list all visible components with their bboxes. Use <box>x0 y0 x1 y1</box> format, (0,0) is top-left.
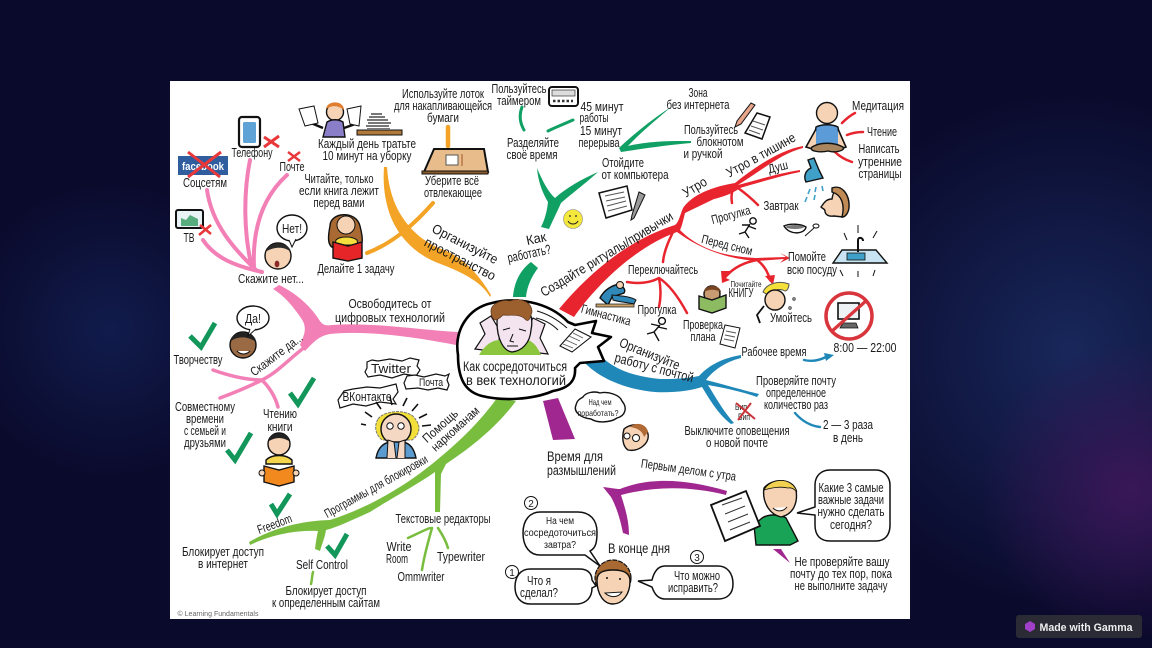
label: blocks access to specific sites: к определенным сайтам <box>272 596 380 610</box>
branch: organize email (blue) <box>576 293 897 450</box>
icon: boy reading green book <box>699 286 726 313</box>
label: use notebook and pen: блокнотом <box>696 135 744 149</box>
icon: thought bubble and face: поработать? <box>578 408 619 418</box>
panel: mind map <box>170 81 910 619</box>
icon: stressed person <box>361 397 431 458</box>
icon: sink <box>833 225 887 277</box>
icon: running figure 2 <box>647 318 667 341</box>
icon: speech cloud mail <box>404 374 449 390</box>
label: help for addicts <box>420 404 482 454</box>
label: family time: друзьями <box>184 436 226 450</box>
callout: what did I do <box>515 569 596 604</box>
label: plan review <box>683 318 723 344</box>
title: how to focus in the age of technology: Как сосредоточиться <box>463 359 567 374</box>
label: read a book <box>728 280 762 300</box>
label: blocks internet access: Блокирует доступ <box>182 545 264 559</box>
label: free yourself from digital technology <box>335 297 445 325</box>
label: reading books: книги <box>268 420 293 434</box>
label: use paper tray: бумаги <box>427 111 459 125</box>
icon: bowl and spoon <box>784 224 819 236</box>
label: plan review: Проверка <box>683 318 723 332</box>
icon: step number 1 <box>506 566 518 579</box>
badge: Made with Gamma <box>1016 615 1142 638</box>
label: help for addicts: Помощь <box>420 406 461 446</box>
branch: digital detox (pink) <box>174 117 458 486</box>
label: family time: Совместному <box>175 400 236 414</box>
label: remove distractions: отвлекающее <box>424 186 482 200</box>
label: internet-free zone <box>666 86 730 112</box>
callout: three most important tasks: Какие 3 самые <box>818 481 884 495</box>
label: quiet morning: Утро в тишине <box>724 130 798 180</box>
label: organize work with email: работу с почтой <box>613 350 695 385</box>
title: how to focus in the age of technology: в век технологий <box>466 373 566 388</box>
label: working hours: Рабочее время <box>742 345 806 359</box>
branch: rituals and habits (red) <box>538 99 904 348</box>
label: at the end of the day: В конце дня <box>608 541 670 556</box>
label: walk: Прогулка <box>710 203 752 227</box>
label: how to work: работать? <box>506 242 552 266</box>
icon: bing crossed out <box>735 402 755 422</box>
label: free yourself from digital technology: цифровых технологий <box>335 311 445 325</box>
label: blocks internet access: в интернет <box>198 557 248 571</box>
icon: bing crossed out: Бип <box>735 402 747 412</box>
label: daily tidy-up <box>318 137 416 163</box>
callout: what did I do: сделал? <box>520 586 558 600</box>
label: walk: Прогулка <box>638 303 677 317</box>
icon: phone crossed out <box>239 117 279 147</box>
label: meditation: Медитация <box>852 99 904 113</box>
label: Typewriter: Typewriter <box>437 550 485 564</box>
icon: smiley <box>564 210 582 228</box>
label: read only when book is in front of you <box>299 172 379 210</box>
label: time for reflection: размышлений <box>547 463 616 478</box>
label: 45 minutes work 15 minutes break: 45 минут <box>580 100 624 114</box>
icon: face saying yes <box>230 306 269 358</box>
label: read only when book is in front of you: если книга лежит <box>299 184 379 198</box>
icon: plan sheet <box>720 325 740 348</box>
callout: what to focus on tomorrow: сосредоточиться <box>524 528 596 539</box>
label: how to work <box>506 229 552 266</box>
label: wash the dishes <box>787 250 838 277</box>
icon: boy reading <box>259 433 299 486</box>
label: use notebook and pen <box>684 123 744 161</box>
label: wash up: Умойтесь <box>770 311 812 325</box>
label: before bed: Перед сном <box>700 232 754 258</box>
callout: what to focus on tomorrow: завтра? <box>544 540 576 551</box>
label: 2-3 times a day: в день <box>833 431 863 445</box>
icon: speech cloud Twitter: Twitter <box>371 362 411 376</box>
icon: thought bubble and face: Над чем <box>588 397 612 407</box>
label: remove distractions <box>424 174 482 200</box>
label: use timer: таймером <box>497 94 541 108</box>
label: TV: ТВ <box>184 231 194 245</box>
label: 2-3 times a day <box>823 418 873 445</box>
label: 8:00 to 22:00: 8:00 — 22:00 <box>834 341 897 355</box>
icon: flying sheet of paper <box>560 329 591 352</box>
icon: facebook crossed out <box>178 152 228 177</box>
callout: what can be improved: Что можно <box>674 569 720 583</box>
label: turn off notifications <box>684 424 790 450</box>
icon: check marks <box>190 323 314 460</box>
icon: papers and pencil <box>599 186 645 220</box>
label: turn off notifications: о новой почте <box>706 436 768 450</box>
icon: notebook and pencil <box>735 103 770 139</box>
label: free yourself from digital technology: Освободитесь от <box>348 297 432 311</box>
label: Ommwriter: Ommwriter <box>398 570 444 584</box>
label: 45 minutes work 15 minutes break: перерыва <box>578 136 620 150</box>
label: help for addicts: наркоманам <box>428 404 482 454</box>
label: check mail a set number of times <box>756 374 837 412</box>
label: use paper tray: Используйте лоток <box>402 87 484 101</box>
callout: what can be improved <box>638 566 733 599</box>
callout: three most important tasks <box>797 470 890 541</box>
icon: face saying no <box>265 215 307 269</box>
icon: person gymnastics <box>596 282 636 307</box>
label: blocks access to specific sites <box>272 584 380 610</box>
branch: reflection time (purple) <box>506 392 892 604</box>
label: read only when book is in front of you: перед вами <box>314 196 365 210</box>
label: wash the dishes: Помойте <box>788 250 826 264</box>
label: how to work: Как <box>525 229 547 248</box>
label: breakfast: Завтрак <box>764 199 799 213</box>
badge: Made with Gamma: Made with Gamma <box>1040 622 1133 634</box>
label: don't check email: Не проверяйте вашу <box>794 555 890 569</box>
label: time for reflection <box>547 449 616 478</box>
label: daily tidy-up: 10 минут на уборку <box>322 149 412 163</box>
label: blocks access to specific sites: Блокирует доступ <box>286 584 366 598</box>
label: blocks internet access <box>182 545 264 571</box>
label: read a book: КНИГУ <box>728 286 754 300</box>
label: reading books <box>263 407 297 434</box>
label: don't check email <box>790 555 892 593</box>
label: morning pages: утренние <box>858 155 902 169</box>
label: 45 minutes work 15 minutes break: 15 минут <box>580 124 622 138</box>
icon: thought bubble and face <box>575 392 648 450</box>
icon: speech cloud VKontakte: ВКонтакте <box>342 390 392 404</box>
label: step away from computer: Отойдите <box>602 156 644 170</box>
callout: what to focus on tomorrow <box>523 512 600 566</box>
label: step away from computer <box>602 156 669 182</box>
label: creativity: Творчеству <box>174 353 223 367</box>
label: remove distractions: Уберите всё <box>425 174 479 188</box>
label: Write Room: Write <box>386 540 412 554</box>
label: Write Room: Room <box>386 552 408 566</box>
icon: running stick figure <box>739 218 756 238</box>
icon: boy with curly hair <box>595 560 631 604</box>
icon: speech cloud VKontakte <box>338 384 398 408</box>
callout: what can be improved: исправить? <box>668 581 718 595</box>
label: internet-free zone: Зона <box>688 86 708 100</box>
label: organize work with email: Организуйте <box>617 335 682 373</box>
branch: organize space (orange) <box>299 87 501 297</box>
branch: how to work (green) <box>492 82 770 297</box>
icon: step number 2 <box>524 496 538 510</box>
label: phone: Телефону <box>232 146 273 160</box>
label: family time: времени <box>186 412 224 426</box>
label: divide your time <box>506 136 559 162</box>
icon: overwhelmed person <box>475 300 567 355</box>
icon: speech cloud mail: Почта <box>419 377 444 389</box>
label: use paper tray <box>394 87 492 125</box>
icon: no computer sign <box>826 293 872 339</box>
icon: person with list <box>711 480 798 545</box>
icon: meditating person <box>806 102 846 152</box>
label: morning pages: Написать <box>858 142 900 156</box>
label: use timer <box>492 82 546 108</box>
label: check mail a set number of times: Проверяйте почту <box>756 374 837 388</box>
icon: step number 1: 1 <box>509 568 515 579</box>
icon: mail cross <box>288 152 300 161</box>
label: turn off notifications: Выключите оповещения <box>684 424 790 438</box>
label: step away from computer: от компьютера <box>602 168 669 182</box>
callout: three most important tasks: нужно сделать <box>818 505 884 519</box>
label: 45 minutes work 15 minutes break <box>578 100 624 150</box>
icon: person tidying papers <box>299 102 402 137</box>
label: time for reflection: Время для <box>547 449 603 464</box>
label: first thing in the morning: Первым делом с утра <box>640 456 737 484</box>
label: use paper tray: для накапливающейся <box>394 99 492 113</box>
icon: woman reading <box>329 215 362 261</box>
label: morning pages <box>858 142 902 181</box>
label: say yes: Скажите да... <box>248 331 306 379</box>
label: organize space: Организуйте <box>430 221 501 267</box>
label: create rituals and habits: Создайте ритуалы/привычки <box>538 209 676 300</box>
icon: step number 3: 3 <box>694 553 700 564</box>
label: don't check email: почту до тех пор, пока <box>790 567 892 581</box>
icon: clean desk <box>422 149 488 174</box>
label: use timer: Пользуйтесь <box>492 82 546 96</box>
icon: TV crossed out <box>176 210 211 235</box>
icon: bing crossed out: Бип <box>738 412 750 422</box>
icon: shower and woman <box>805 158 849 217</box>
callout: what did I do: Что я <box>527 574 551 588</box>
label: organize space: пространство <box>422 235 498 283</box>
icon: person washing <box>757 282 795 323</box>
label: 45 minutes work 15 minutes break: работы <box>580 111 609 125</box>
label: check mail a set number of times: количество раз <box>764 398 828 412</box>
icon: timer <box>549 87 578 106</box>
label: family time: с семьей и <box>184 424 226 438</box>
icon: step number 3 <box>690 550 704 564</box>
label: Freedom: Freedom <box>255 512 294 537</box>
label: use notebook and pen: и ручкой <box>684 147 723 161</box>
label: morning: Утро <box>680 174 710 200</box>
label: plan review: плана <box>690 330 716 344</box>
label: shower: Душ <box>767 158 789 176</box>
label: internet-free zone: без интернета <box>666 98 730 112</box>
label: gymnastics: Гимнастика <box>580 302 633 329</box>
icon: speech cloud Twitter <box>365 358 420 378</box>
label: wash the dishes: всю посуду <box>787 263 838 277</box>
title: how to focus in the age of technology <box>463 359 567 388</box>
central bubble: how to focus in the age of technology <box>457 300 611 399</box>
icon: check marks <box>271 494 347 555</box>
label: divide your time: Разделяйте <box>507 136 559 150</box>
label: Write Room <box>386 540 412 566</box>
label: mail: Почте <box>280 160 305 174</box>
label: reading: Чтение <box>867 125 897 139</box>
icon: step number 2: 2 <box>528 499 534 510</box>
callout: three most important tasks: важные задачи <box>818 493 884 507</box>
copyright: © Learning Fundamentals <box>178 610 259 618</box>
label: do one task: Делайте 1 задачу <box>318 262 395 276</box>
label: say no: Скажите нет... <box>238 272 304 286</box>
label: divide your time: своё время <box>506 148 558 162</box>
label: 2-3 times a day: 2 — 3 раза <box>823 418 873 432</box>
label: reading books: Чтению <box>263 407 297 421</box>
label: switch: Переключайтесь <box>628 263 698 277</box>
label: family time <box>175 400 236 450</box>
label: text editors: Текстовые редакторы <box>396 512 491 526</box>
label: read only when book is in front of you: Читайте, только <box>304 172 374 186</box>
callout: what to focus on tomorrow: На чем <box>546 516 574 527</box>
icon: face saying no: Нет! <box>282 222 302 236</box>
label: morning pages: страницы <box>858 167 902 181</box>
branch: help for addicts (light green) <box>182 358 516 610</box>
label: check mail a set number of times: определенное <box>766 386 826 400</box>
callout: three most important tasks: сегодня? <box>830 518 872 532</box>
label: blocking programs: Программы для блокировки <box>322 452 430 521</box>
label: Self Control: Self Control <box>296 558 348 572</box>
label: don't check email: не выполните задачу <box>794 579 888 593</box>
icon: face saying yes: Да! <box>245 312 261 326</box>
label: read a book: Почитайте <box>730 280 762 289</box>
label: social networks: Соцсетям <box>183 176 227 190</box>
icon: facebook crossed out: facebook <box>182 161 225 173</box>
label: use notebook and pen: Пользуйтесь <box>684 123 738 137</box>
label: daily tidy-up: Каждый день тратьте <box>318 137 416 151</box>
